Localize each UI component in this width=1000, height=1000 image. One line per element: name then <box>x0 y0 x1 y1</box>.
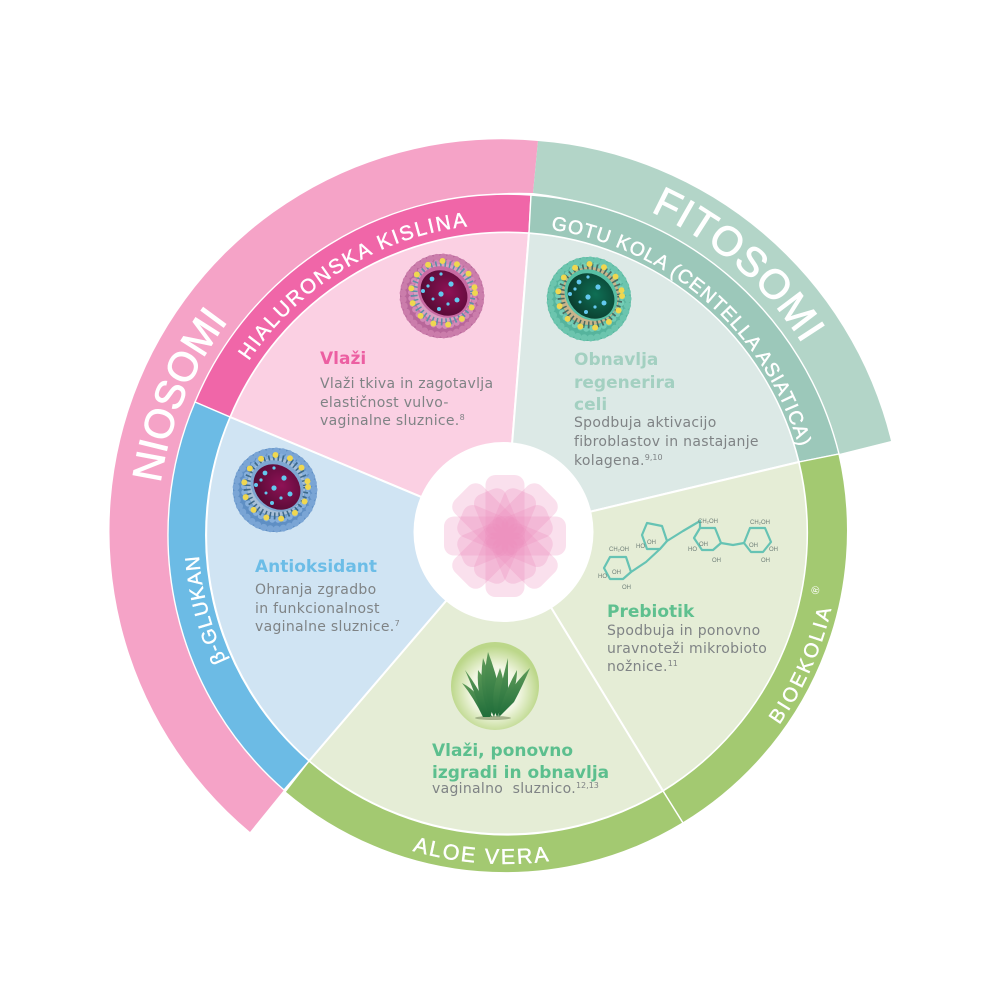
panel: bioekolia <box>552 454 847 822</box>
heading: vlaži, ponovno izgradi in obnavlja: Vlaži, ponovno <box>432 741 573 761</box>
band label: gotu kola: GOTU KOLA (CENTELLA ASIATICA) <box>552 217 812 445</box>
text: vlaži: 8 <box>460 413 465 422</box>
icon: prebiotic molecule: HO <box>598 574 607 580</box>
band label: beta-glukan: β-GLUKAN <box>185 557 230 664</box>
icon: prebiotic molecule: OH <box>712 558 721 564</box>
text: antioksidant: in funkcionalnost <box>255 601 380 617</box>
icon: prebiotic molecule: HO <box>688 547 697 553</box>
heading: obnavlja regenerira celi: celi <box>574 395 607 415</box>
icon: pink vesicle <box>400 254 484 338</box>
centre circle with flower <box>414 442 594 622</box>
icon: prebiotic molecule: OH <box>612 570 621 576</box>
text: prebiotik: 11 <box>668 659 678 668</box>
text: prebiotik: nožnice. <box>607 659 668 675</box>
heading: antioksidant: Antioksidant <box>255 557 377 577</box>
heading: prebiotik: Prebiotik <box>607 602 695 622</box>
label: fitosomi: FITOSOMI <box>653 186 825 342</box>
registered mark: ® <box>809 585 823 596</box>
text: antioksidant: Ohranja zgradbo <box>255 582 376 598</box>
icon: prebiotic molecule: OH <box>749 543 758 549</box>
icon: prebiotic molecule: CH₂OH <box>750 520 770 526</box>
band label: hialuronska kislina: HIALURONSKA KISLINA <box>238 212 468 360</box>
outer ring: niosomi <box>110 139 538 832</box>
heading: vlaži, ponovno izgradi in obnavlja: izgradi in obnavlja <box>432 763 609 783</box>
text: prebiotik: Spodbuja in ponovno <box>607 623 760 639</box>
text: prebiotik: uravnoteži mikrobioto <box>607 641 767 657</box>
icon: prebiotic molecule: HO <box>636 544 645 550</box>
panel: beta-glukan <box>167 402 446 790</box>
icon: prebiotic molecule: OH <box>647 540 656 546</box>
text: obnavlja: Spodbuja aktivacijo <box>574 415 717 431</box>
text: vaginalno sluznico: vaginalno sluznico. <box>432 781 576 797</box>
heading: vlaži: Vlaži <box>320 349 366 369</box>
text: vlaži: elastičnost vulvo- <box>320 395 449 411</box>
icon: prebiotic molecule: OH <box>769 547 778 553</box>
text: antioksidant: vaginalne sluznice. <box>255 619 395 635</box>
band label: aloe vera: ALOE VERA <box>412 838 550 864</box>
icon: prebiotic molecule: OH <box>622 585 631 591</box>
panel: hialuronska kislina <box>194 194 530 496</box>
outer ring: fitosomi <box>533 141 891 454</box>
band label: bioekolia: BIOEKOLIA <box>768 609 832 724</box>
text: vlaži: Vlaži tkiva in zagotavlja <box>320 376 493 392</box>
text: vaginalno sluznico: 12,13 <box>576 781 599 790</box>
icon: prebiotic molecule: CH₂OH <box>698 519 718 525</box>
icon: flower <box>444 475 566 597</box>
label: niosomi: NIOSOMI <box>132 306 226 480</box>
text: obnavlja: kolagena. <box>574 453 645 469</box>
text: antioksidant: 7 <box>395 619 400 628</box>
heading: obnavlja regenerira celi: Obnavlja <box>574 350 658 370</box>
icon: prebiotic molecule: OH <box>699 542 708 548</box>
heading: obnavlja regenerira celi: regenerira <box>574 373 675 393</box>
icon: aloe plant <box>451 642 539 730</box>
icon: prebiotic molecule <box>598 519 778 591</box>
panel: aloe vera <box>286 602 684 872</box>
text: obnavlja: fibroblastov in nastajanje <box>574 434 759 450</box>
icon: prebiotic molecule: CH₂OH <box>609 547 629 553</box>
icon: teal vesicle <box>547 257 631 341</box>
text: vlaži: vaginalne sluznice. <box>320 413 460 429</box>
icon: prebiotic molecule: OH <box>761 558 770 564</box>
panel: gotu kola <box>511 196 840 510</box>
icon: blue vesicle <box>233 448 317 532</box>
text: obnavlja: 9,10 <box>645 453 663 462</box>
